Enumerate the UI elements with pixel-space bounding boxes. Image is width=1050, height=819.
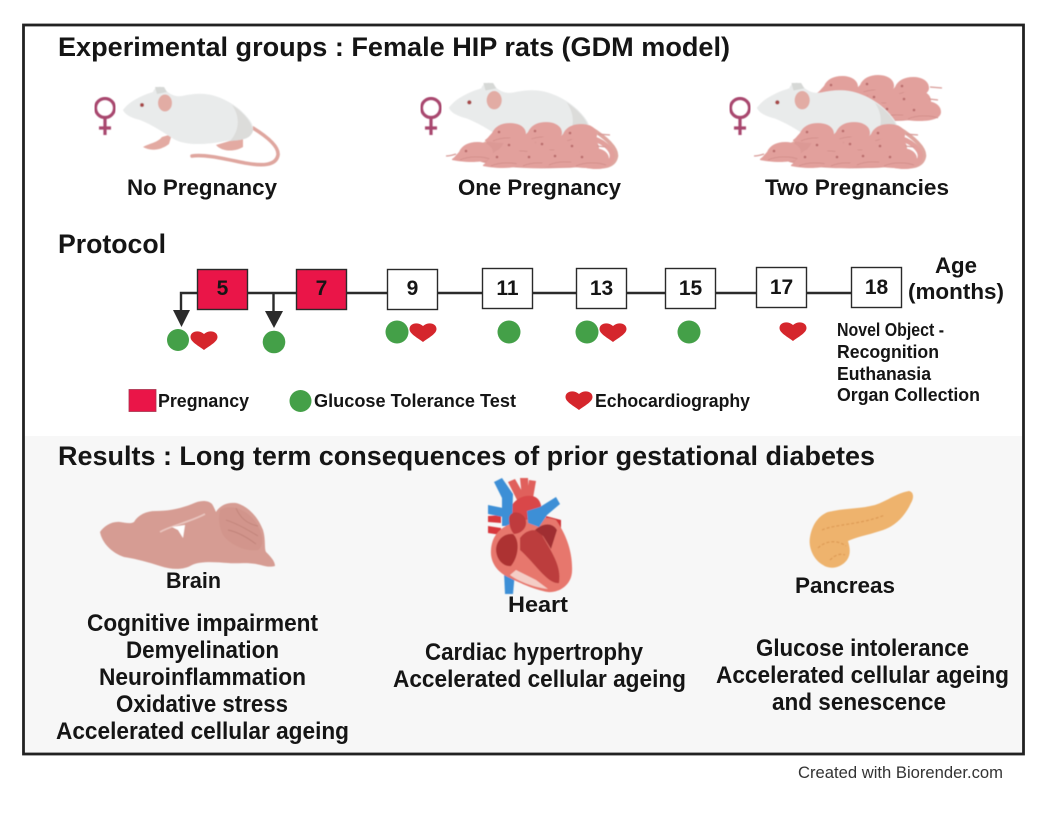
- arrow: first test: [173, 310, 190, 327]
- text: 18 month procedures: Euthanasia: [837, 364, 932, 384]
- text: brain outcomes: Accelerated cellular ageing: [56, 718, 349, 745]
- timepoint 15 months: [666, 268, 716, 308]
- text: heart outcomes: Accelerated cellular ageing: [393, 666, 686, 693]
- column: heart: [393, 478, 686, 693]
- timepoint 9 months: 9: [407, 277, 418, 300]
- text: pancreas outcomes: Accelerated cellular ageing: [716, 662, 1009, 689]
- label: two pregnancies: Two Pregnancies: [765, 175, 949, 200]
- marker: test after first pregnancy: [263, 331, 285, 353]
- timepoint 18 months: 18: [865, 276, 888, 299]
- axis label: age in months: Age: [935, 253, 977, 278]
- icon: female symbol: [96, 98, 114, 135]
- legend: [129, 390, 751, 412]
- markers: tests at 13 months: [576, 320, 626, 344]
- legend item: pregnancy: Pregnancy: [158, 390, 250, 411]
- text: brain outcomes: Cognitive impairment: [87, 610, 318, 637]
- timepoint 11 months: [482, 268, 532, 308]
- timepoint 7 months: 7: [316, 277, 327, 300]
- timepoint 11 months: 11: [496, 277, 519, 300]
- axis label: age in months: [908, 253, 1004, 304]
- timepoint 7 months: [296, 270, 346, 310]
- timeline line: [181, 293, 877, 312]
- icon: female symbol: [730, 98, 750, 135]
- text: brain outcomes: Demyelination: [126, 637, 279, 664]
- group: no pregnancy: [96, 87, 278, 200]
- label: no pregnancy: No Pregnancy: [127, 175, 277, 200]
- panel: protocol: [58, 229, 1004, 412]
- text: brain outcomes: Oxidative stress: [116, 691, 288, 718]
- timepoint 13 months: 13: [590, 277, 613, 300]
- arrow: second test: [265, 311, 283, 328]
- timepoint 5 months: 5: [217, 277, 229, 300]
- marker: echocardiography at 17 months: [780, 322, 806, 341]
- label: pancreas: Pancreas: [795, 573, 895, 598]
- text: heart outcomes: Cardiac hypertrophy: [425, 639, 644, 666]
- icon: pancreas: [810, 491, 913, 568]
- column: brain: [56, 501, 349, 745]
- text: 18 month procedures: Organ Collection: [837, 385, 980, 405]
- credit line: Created with Biorender.com: [798, 764, 1003, 782]
- axis label: age in months: (months): [908, 279, 1004, 304]
- heading: results: Results : Long term consequences of prior gestational diabetes: [58, 441, 875, 471]
- timepoint 15 months: 15: [679, 277, 702, 300]
- icon: heart: [488, 478, 572, 594]
- legend item: glucose tolerance test: Glucose Tolerance Test: [314, 390, 516, 411]
- text: brain outcomes: Neuroinflammation: [99, 664, 306, 691]
- icon: brain: [100, 501, 275, 569]
- text: pancreas outcomes: Glucose intolerance: [756, 635, 969, 662]
- marker: test at 11 months: [498, 320, 520, 344]
- label: one pregnancy: One Pregnancy: [458, 175, 621, 200]
- timepoint 18 months: [852, 268, 902, 308]
- icon: female symbol: [422, 98, 440, 135]
- legend item: echocardiography: Echocardiography: [595, 390, 751, 411]
- panel: experimental groups: [58, 32, 949, 200]
- text: 18 month procedures: Recognition: [837, 342, 939, 362]
- timepoint 17 months: [756, 268, 806, 308]
- results background panel: [24, 436, 1023, 753]
- markers: tests before pregnancy: [167, 329, 218, 351]
- label: brain: Brain: [166, 568, 221, 593]
- timepoint 13 months: [576, 268, 626, 308]
- label: heart: Heart: [508, 592, 569, 617]
- markers: tests at 9 months: [386, 320, 436, 344]
- text: brain outcomes: [56, 610, 349, 745]
- column: pancreas: [716, 491, 1009, 716]
- icon: adult rat: [123, 87, 278, 165]
- panel: results: [56, 441, 1009, 745]
- timepoint 9 months: [388, 270, 438, 310]
- text: pancreas outcomes: and senescence: [772, 689, 946, 716]
- text: 18 month procedures: [837, 320, 980, 405]
- text: 18 month procedures: Novel Object -: [837, 320, 944, 340]
- text: heart outcomes: [393, 639, 686, 693]
- heading: experimental groups: Experimental groups : Female HIP rats (GDM model): [58, 32, 730, 62]
- marker: test at 15 months: [678, 320, 700, 344]
- timepoint 5 months: [198, 270, 248, 310]
- icon: rat with one litter: [446, 83, 616, 168]
- heading: protocol: Protocol: [58, 229, 166, 259]
- icon: rat with two litters: [754, 75, 942, 168]
- timepoint 17 months: 17: [770, 276, 793, 299]
- group: one pregnancy: [422, 83, 621, 200]
- group: two pregnancies: [730, 75, 949, 200]
- text: pancreas outcomes: [716, 635, 1009, 716]
